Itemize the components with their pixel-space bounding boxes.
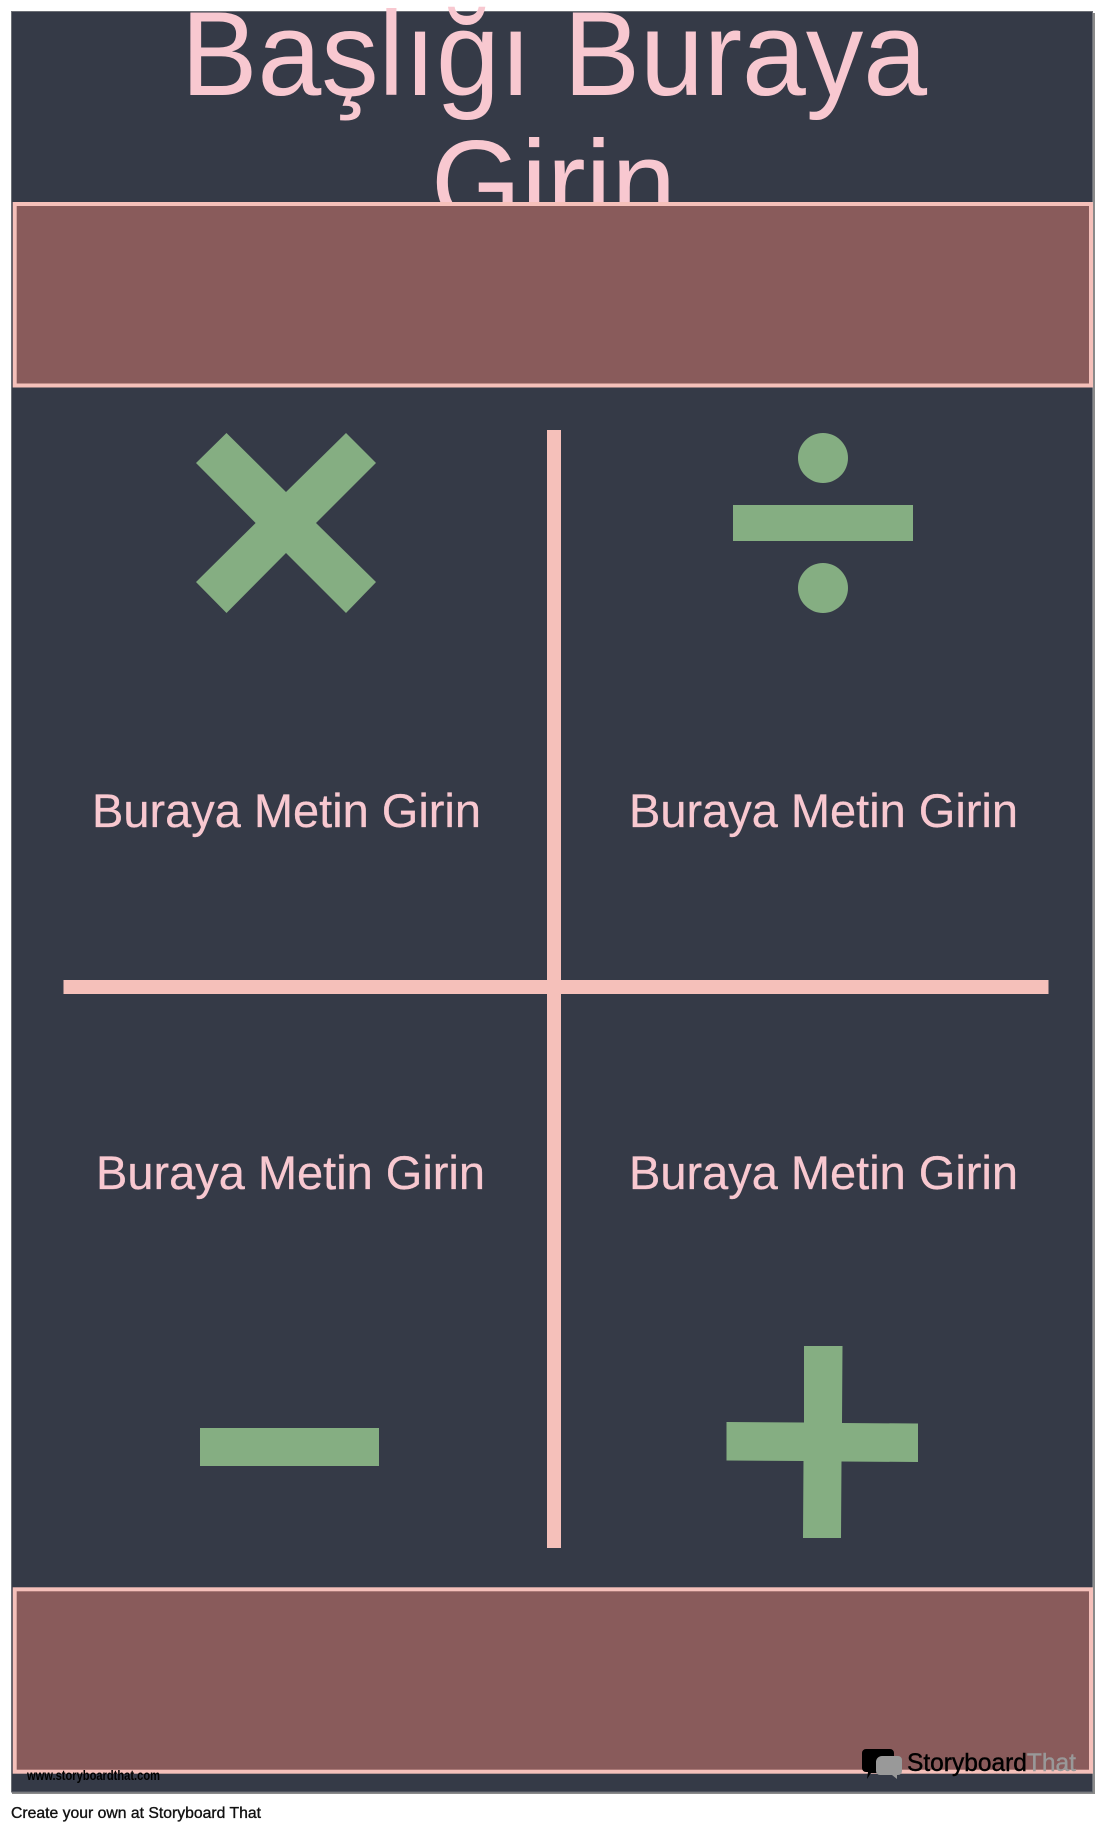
text: top right: Buraya Metin Girin xyxy=(629,784,1018,837)
logo wordmark: StoryboardThat xyxy=(907,1749,1076,1777)
text: bottom right: Buraya Metin Girin xyxy=(629,1146,1018,1199)
watermark url: www.storyboardthat.com xyxy=(26,1767,160,1783)
vertical divider xyxy=(547,430,561,1548)
icon: multiplication sign xyxy=(196,433,376,613)
horizontal divider xyxy=(64,980,1048,994)
text: top left: Buraya Metin Girin xyxy=(92,784,481,837)
caption: Create your own at Storyboard That xyxy=(11,1805,262,1822)
title: Girin xyxy=(431,116,676,250)
bottom band xyxy=(15,1589,1091,1772)
icon: grey speech bubble xyxy=(876,1756,902,1779)
top band xyxy=(15,204,1091,386)
title xyxy=(181,0,927,250)
icon: minus sign xyxy=(200,1428,379,1466)
icon: plus sign xyxy=(726,1346,918,1538)
icon: division sign xyxy=(733,433,913,613)
text: bottom left: Buraya Metin Girin xyxy=(96,1146,485,1199)
icon: black speech bubble xyxy=(862,1749,894,1779)
logo: Storyboard That xyxy=(862,1749,1076,1779)
